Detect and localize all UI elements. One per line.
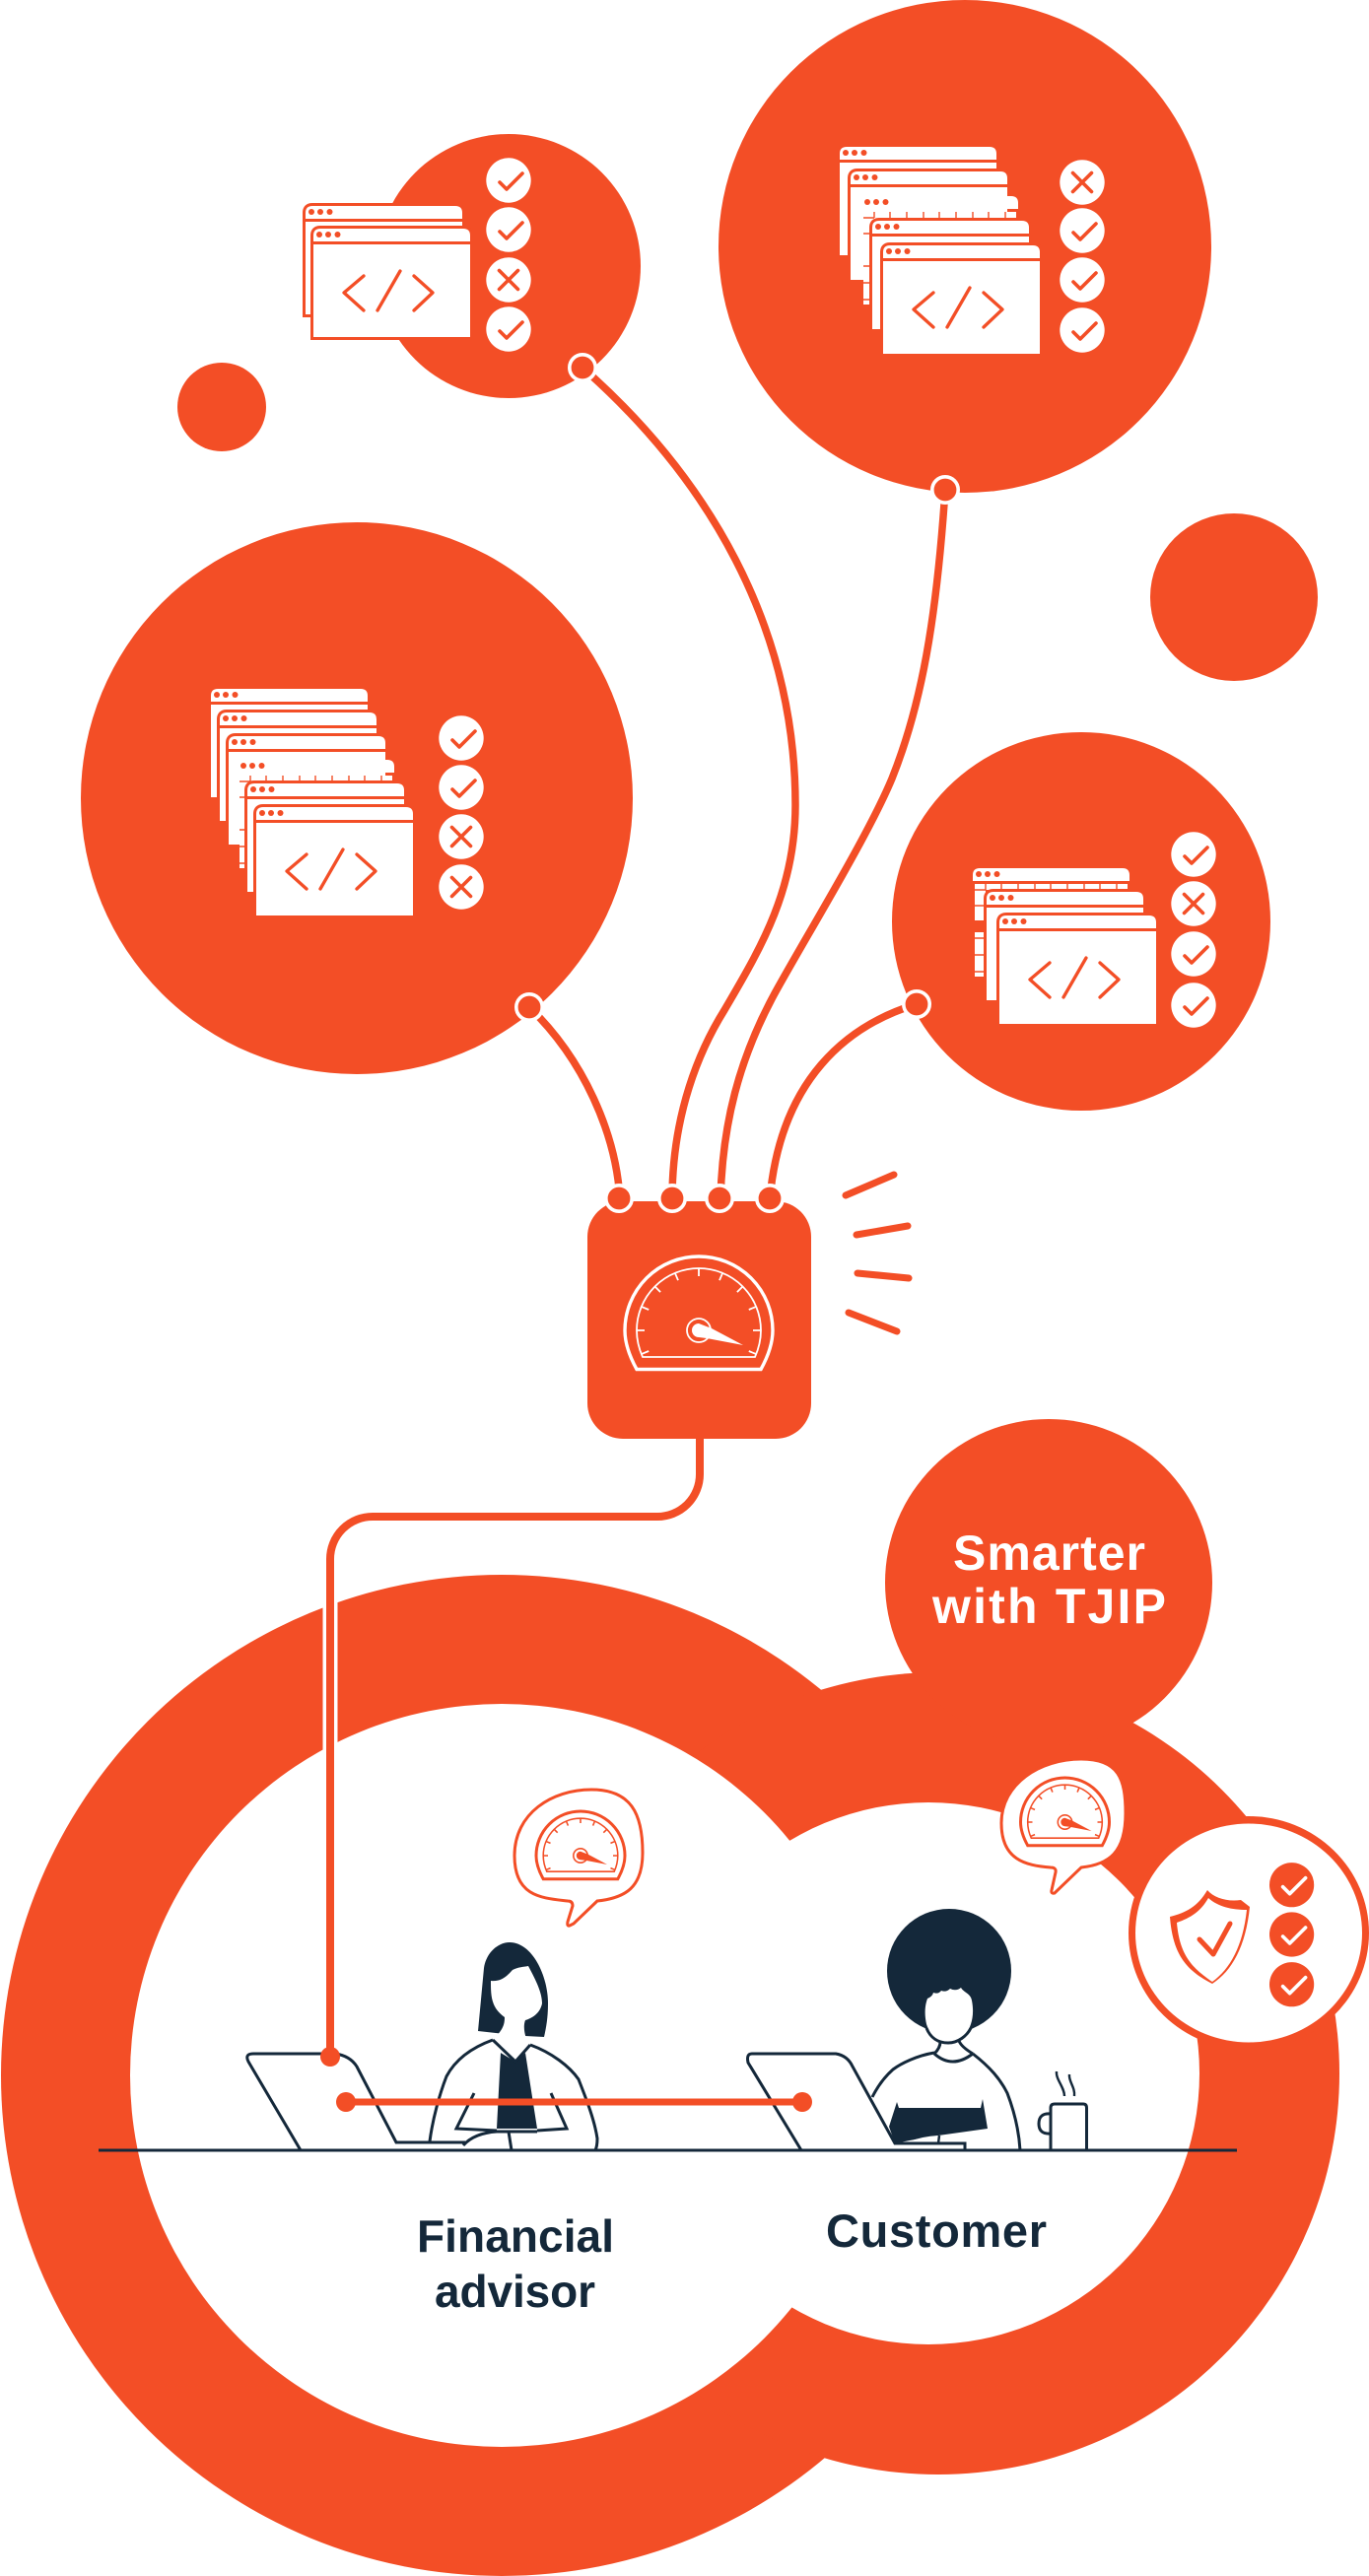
- icon: coffee mug: [1039, 2071, 1086, 2150]
- decorative circle: small left dot: [177, 363, 266, 451]
- icon: speedometer: [625, 1256, 773, 1370]
- cloud outer shape: [1, 1575, 1339, 2576]
- label: Financial advisor: advisor: [435, 2266, 595, 2317]
- customer laptop: [747, 2054, 965, 2150]
- speech bubble: advisor speed: [514, 1790, 643, 1926]
- badge: Smarter with TJIP: with TJIP: [931, 1579, 1166, 1634]
- connector nodes on circles and box: [516, 355, 958, 1211]
- panel: right circle with three windows: [892, 732, 1270, 1111]
- decorative circle: right dot: [1150, 513, 1318, 681]
- connector wires from circles to the speed box: [529, 368, 945, 1199]
- table line: [99, 2148, 1237, 2152]
- cloud inner white shape: [130, 1704, 1199, 2447]
- speed rays beside the box: [846, 1175, 909, 1331]
- icon: mini speedometer: [536, 1811, 625, 1879]
- panel: shield security circle: [1129, 1816, 1369, 2050]
- panel: small test circle with two windows: [306, 134, 641, 398]
- label: Financial advisor: Financial: [417, 2210, 614, 2262]
- label: Customer: Customer: [826, 2204, 1047, 2257]
- icon: shield with check: [1170, 1890, 1250, 1984]
- central box with speedometer: [587, 1201, 811, 1439]
- label: Financial advisor: [417, 2210, 614, 2317]
- line connecting advisor and customer: [320, 2047, 812, 2112]
- wire from box to advisor laptop: [330, 1439, 700, 2057]
- panel: top right circle with five windows: [719, 0, 1211, 493]
- figure: financial advisor: [430, 1942, 597, 2150]
- icon: mini speedometer: [1021, 1778, 1110, 1846]
- panel: left large circle with six windows: [81, 522, 633, 1074]
- speech bubble: customer speed: [1001, 1759, 1126, 1893]
- advisor laptop: [247, 2054, 465, 2150]
- figure: customer: [872, 1909, 1020, 2150]
- badge: Smarter with TJIP: Smarter: [953, 1525, 1145, 1581]
- badge: Smarter with TJIP: [885, 1419, 1212, 1746]
